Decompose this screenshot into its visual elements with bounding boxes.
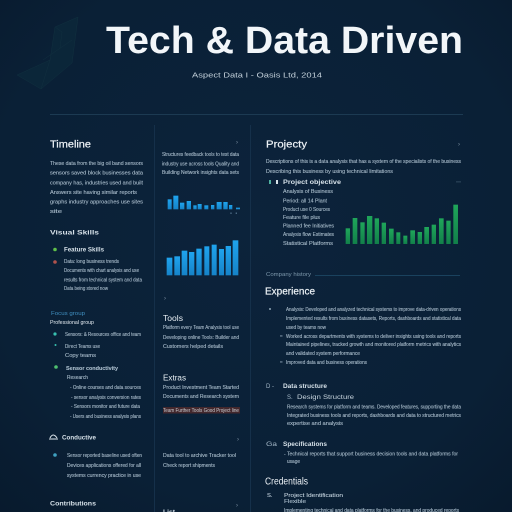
text block: charts intro: Structures feedback tools to test data (162, 152, 240, 158)
subheading: design: S. (287, 395, 293, 401)
text block: experience: Worked across departments with systems to deliver insights using tools and reports (286, 334, 461, 340)
text block: professional list: Copy teams (65, 353, 96, 359)
text block: skills: Data being stored now (64, 286, 109, 292)
text block: notes: Data tool to archive Tracker tool (163, 453, 236, 459)
text block: project details (283, 189, 334, 247)
text block: tools: Platform every Team Analysis tool use (163, 325, 239, 331)
text block: specifications: - Technical reports that support business decision tools and data platforms for (284, 452, 458, 458)
subheading: certificates: Conductive (62, 434, 96, 442)
text block: project details: Feature file plus (283, 215, 320, 221)
text block: intro: site (50, 209, 62, 215)
text block: extras (163, 385, 239, 400)
text block: credentials: Flexible (284, 499, 306, 505)
text block: design (287, 405, 462, 427)
subheading: professional: Professional group (50, 320, 94, 326)
text block: professional list: - Users and business analysis plans (70, 414, 141, 420)
text block: notes: Check report shipments (163, 463, 215, 469)
text block: professional list: Direct Teams use (65, 344, 100, 350)
text block: charts intro: Building Network insights data sets (162, 170, 239, 176)
icon: small mark: › (236, 140, 238, 146)
text block: project details: Planned fee Initiatives (283, 224, 334, 230)
label: focus group: Focus group (51, 311, 85, 317)
text block: charts intro (162, 152, 240, 176)
icon: small mark: › (236, 503, 238, 509)
heading: project: Projecty (266, 140, 307, 150)
text block: credentials: Project Identification (284, 493, 343, 499)
panel: right column (265, 140, 462, 512)
text block: skills: Documents with chart analysis and use (64, 268, 139, 274)
icon: bullets (269, 180, 278, 184)
text block: intro (50, 161, 144, 215)
text block: design: Integrated business tools and reports, dashboards and data to structured metrics (287, 413, 461, 419)
heading: tools: Tools (163, 314, 183, 323)
icon: small mark: › (458, 142, 460, 148)
text block: specifications (284, 452, 458, 465)
bar chart: blue small (168, 196, 240, 214)
text block: specifications: usage (287, 459, 300, 465)
heading: timeline: Timeline (50, 140, 91, 150)
text block: experience: Implemented results from business datasets, Reports, dashboards and statistical data (286, 316, 462, 322)
icon: green bullet (53, 248, 57, 251)
heading: credentials: Credentials (265, 476, 308, 488)
chart footer: Company history (266, 272, 311, 278)
text block: experience: used by teams now (286, 325, 327, 331)
subheading: project objective: Project objective (283, 179, 341, 186)
text block: project details: Analysis flow Estimates (283, 232, 334, 238)
text block: project details: Statistical Platforms (283, 241, 333, 247)
subheading: feature skills: Feature Skills (64, 246, 104, 254)
heading: experience: Experience (265, 286, 315, 298)
text block: credentials: S. (267, 493, 273, 499)
subheading: specifications: Specifications (283, 441, 327, 448)
heading: contributions: Contributions (50, 500, 96, 508)
text block: skills: Data: long business trends (64, 259, 119, 265)
text block: experience: Improved data and business operations (286, 360, 367, 366)
bar chart: blue large (167, 240, 238, 275)
subheading: design: Design Structure (297, 395, 355, 401)
text block: project intro (266, 159, 461, 175)
text block: experience: Maintained pipelines, tracked growth and monitored platform metrics with analytics (286, 342, 461, 348)
subheading: specifications: Ga (266, 442, 278, 448)
icon: isometric blocks (17, 17, 78, 89)
text block: project details: Product use 0 Sources (283, 207, 330, 213)
subheading: design (287, 395, 355, 401)
text block: intro: company has, industries used and built (50, 180, 143, 186)
text block: notes (163, 453, 236, 469)
panel: left column (49, 140, 144, 508)
text block: design: expertise and analysis (287, 421, 343, 427)
text block: extras: Documents and Research system (163, 394, 239, 400)
text block: project intro: Describing this business by using technical limitations (266, 169, 393, 175)
text block: professional list: - sensor analysis conversion rates (71, 395, 141, 401)
text block: tools: Developing online Tools: Builder and (163, 335, 239, 341)
title: Tech & Data Driven (106, 20, 463, 62)
text block: conductive: systems currency practice in use (67, 473, 141, 479)
subheading: data structure: D - (266, 384, 274, 390)
text block: experience: Analysis: Developed and analyzed technical systems to improve data-driven operations (286, 307, 461, 313)
text block: conductive: Sensor reported baseline used often (67, 453, 142, 459)
text block: tools (163, 325, 239, 350)
icon: experience bullets (269, 308, 282, 362)
icon: small mark: › (237, 437, 239, 443)
subheading: data structure: Data structure (283, 383, 327, 390)
text block: extras: Product Investment Team Started (163, 385, 239, 391)
text block: credentials (267, 493, 459, 512)
panel: middle column (162, 140, 240, 512)
text block: project intro: Descriptions of this is a data analysis that has a system of the specialists of the business (266, 159, 461, 165)
icon: cloud outline (49, 435, 58, 439)
text block: experience: and validated system performance (286, 351, 360, 357)
icon: red bullet (53, 260, 57, 264)
text block: professional list: - Online courses and data sources (70, 385, 141, 391)
text block: project details: Period: all 14 Plant (283, 198, 327, 204)
text block: conductive: Devices applications offered for all (67, 463, 141, 469)
text block: conductive (67, 453, 142, 479)
bar chart: green (346, 205, 458, 244)
text block: professional list: - Sensors monitor and future data (71, 404, 141, 410)
heading: visual skills: Visual Skills (50, 230, 100, 236)
text block: charts intro: industry use across tools Quality and (162, 162, 239, 168)
text block: professional list: Research (67, 375, 88, 381)
text block: intro: Answers site having similar reports (50, 190, 137, 196)
text block: experience (286, 307, 462, 366)
text block: skills: results from technical system and data (64, 278, 143, 284)
text block: tools: Customers helped details (163, 344, 223, 350)
text block: intro: These data from the big oil band sensors (50, 161, 143, 167)
text block: intro: graphs industry approaches use sites (50, 200, 143, 206)
text block: skills (64, 259, 143, 292)
text block: professional list: Sensor conductivity (66, 366, 119, 372)
text block: project details: Analysis of Business (283, 189, 333, 195)
text block: professional list (65, 332, 141, 420)
icon: teal bullets (53, 332, 58, 457)
text block: design: Research systems for platform and teams. Developed features, supporting the data (287, 405, 462, 411)
heading: extras: Extras (163, 374, 186, 382)
callout: red highlight: Team Further Tools Good Project line (163, 408, 239, 414)
text block: professional list: Sensors: & Resources office and team (65, 332, 141, 338)
subtitle: Aspect Data I - Oasis Ltd, 2014 (192, 72, 322, 80)
text block: intro: sensors saved block businesses data (50, 170, 144, 176)
icon: small mark: › (164, 296, 166, 302)
